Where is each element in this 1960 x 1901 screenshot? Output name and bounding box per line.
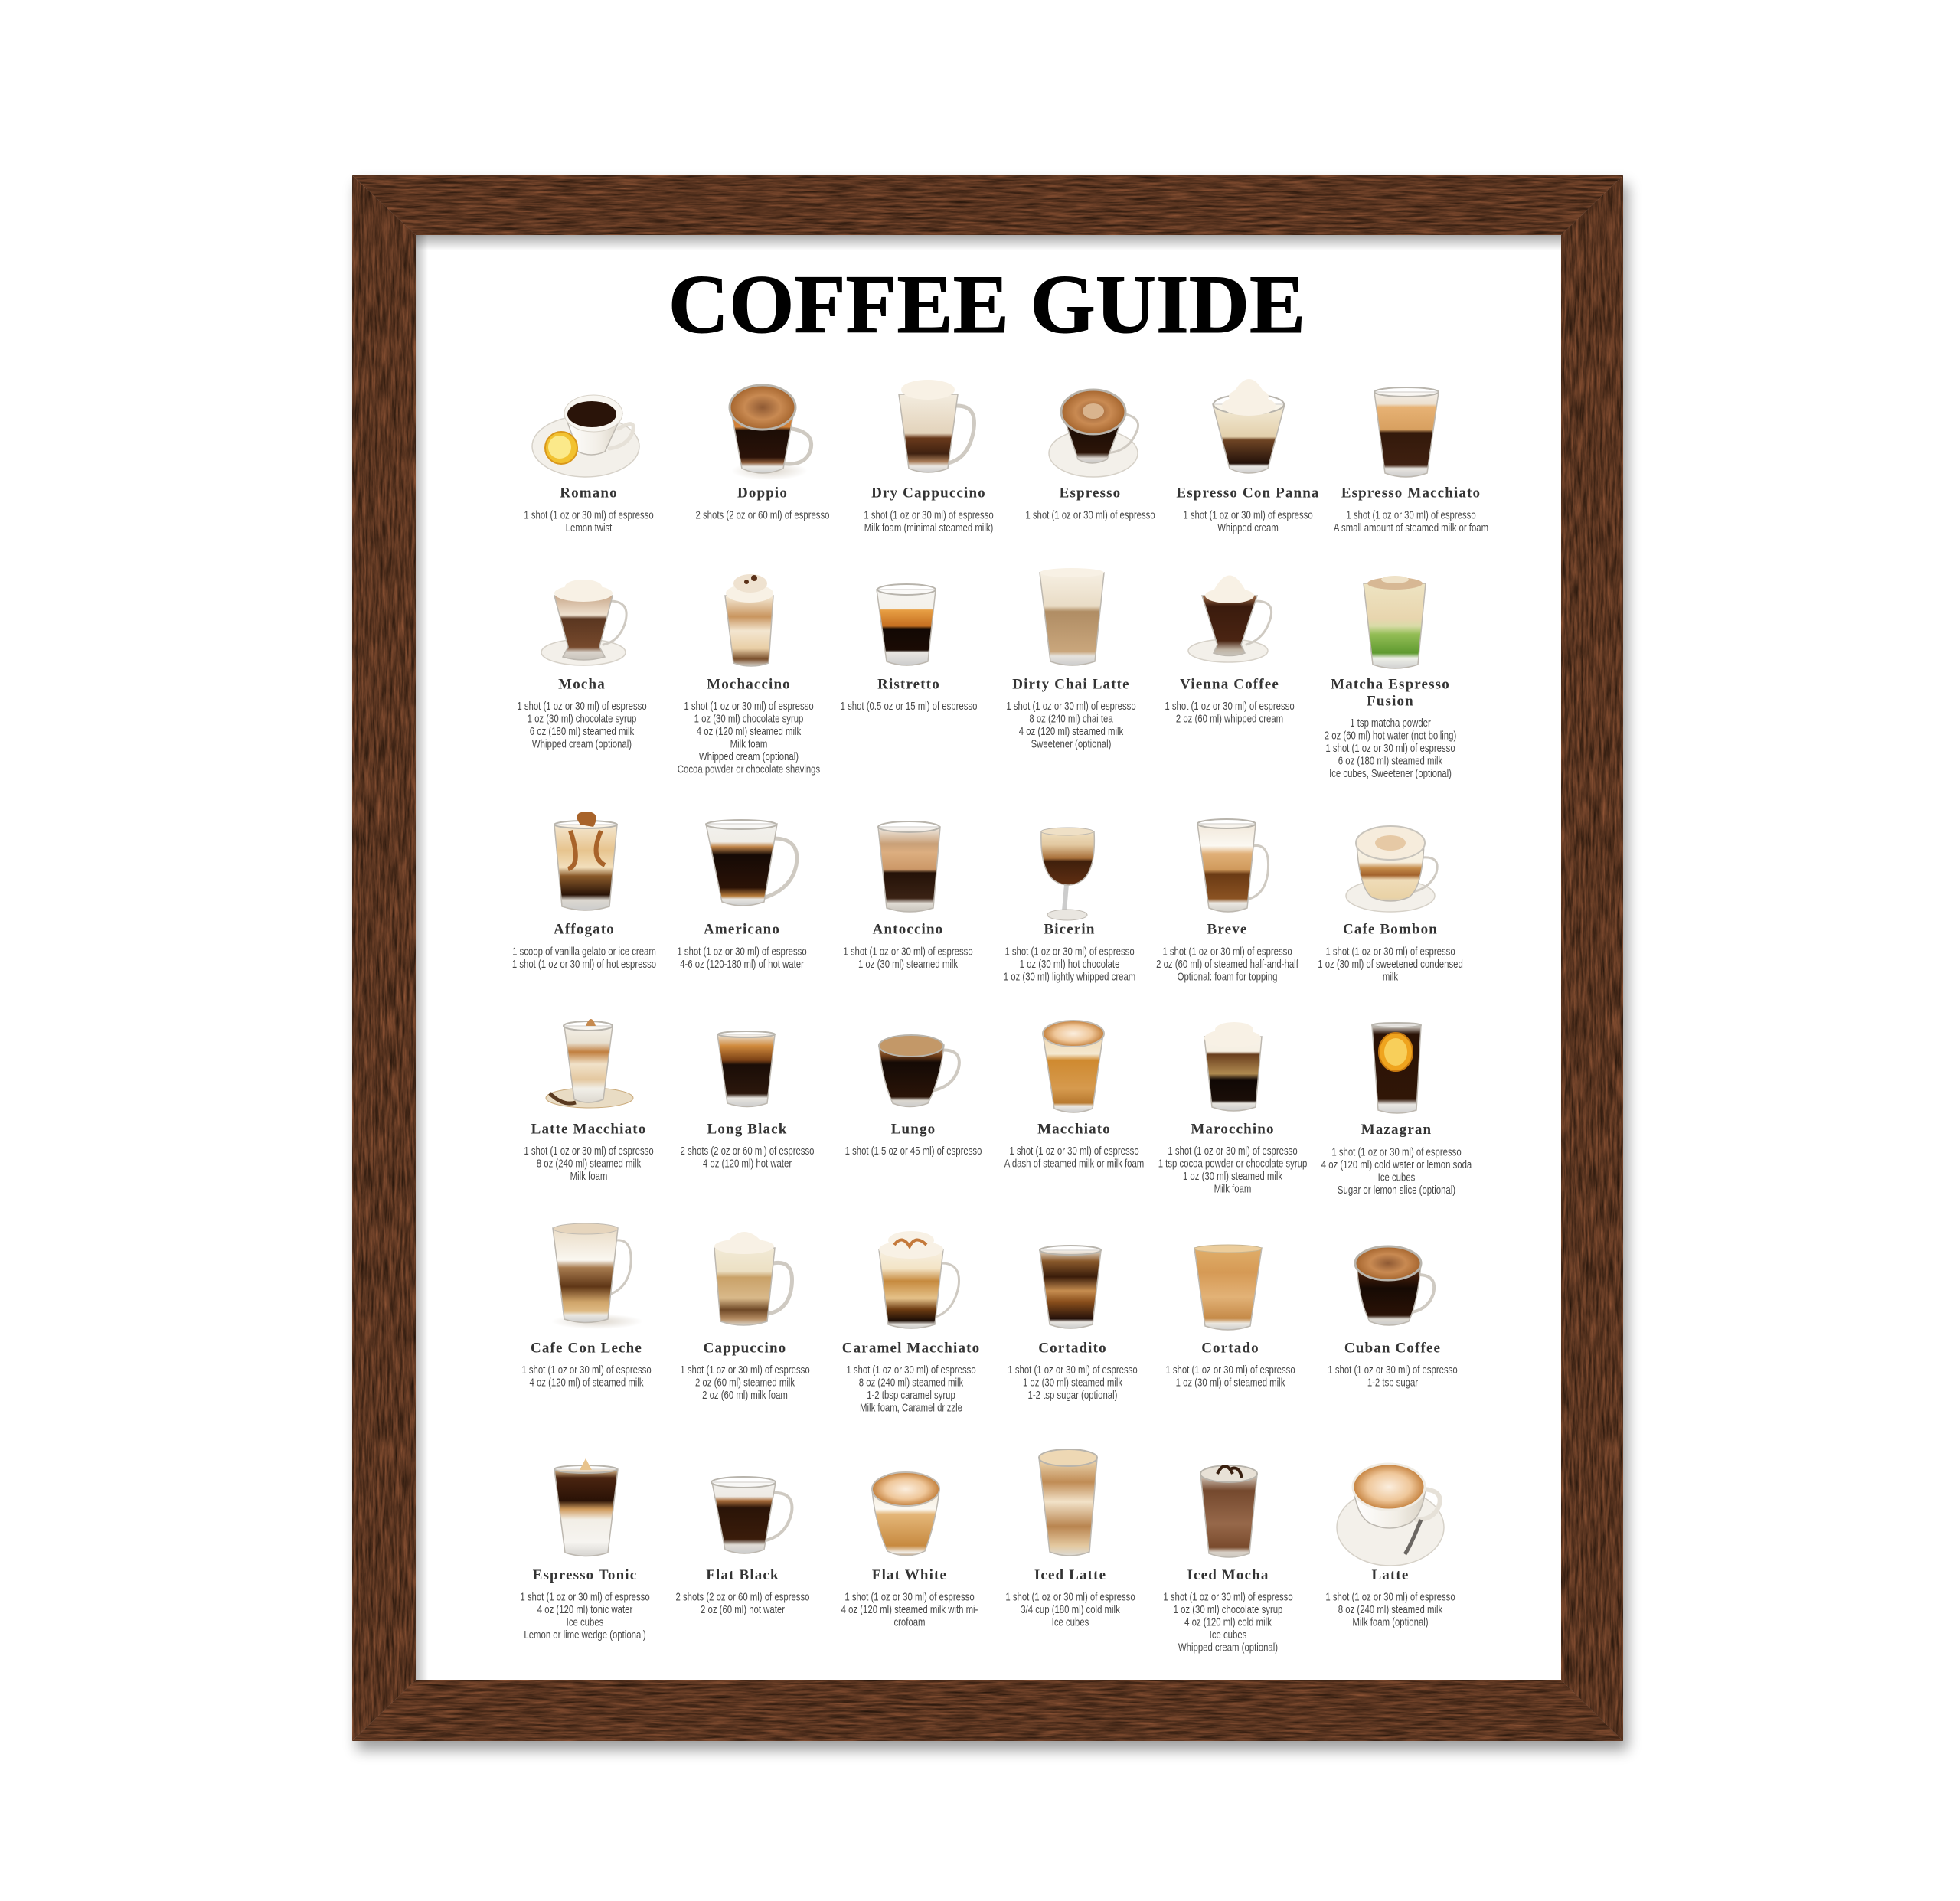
card: Iced Latte: [1005, 1449, 1135, 1628]
recipe: 1 shot (1 oz or 30 ml) of espresso: [1325, 1590, 1455, 1603]
icon: Macchiato glass with latte art: [1043, 1021, 1104, 1112]
name: Affogato: [554, 922, 615, 937]
recipe: 1 shot (1 oz or 30 ml) of espresso: [864, 508, 994, 521]
recipe: 1 shot (1 oz or 30 ml) of espresso: [1004, 945, 1135, 958]
recipe: 2 oz (60 ml) milk foam: [702, 1389, 788, 1401]
name: Flat White: [872, 1567, 947, 1583]
recipe: 1 shot (1 oz or 30 ml) of espresso: [1165, 700, 1295, 712]
icon: Dirty Chai Latte tall glass: [1040, 568, 1104, 665]
recipe: 1 shot (1 oz or 30 ml) of espresso: [1009, 1145, 1139, 1157]
name: Espresso Con Panna: [1176, 485, 1320, 501]
name: Bicerin: [1044, 922, 1096, 937]
name: Americano: [704, 922, 780, 937]
recipe: Milk foam: [730, 737, 767, 750]
icon: Cappuccino mug: [714, 1232, 792, 1325]
recipe: Sweetener (optional): [1031, 737, 1111, 750]
recipe: 1 tsp cocoa powder or chocolate syrup: [1158, 1157, 1307, 1170]
card: Mazagran: [1321, 1023, 1472, 1196]
icon: Cafe Bombon cup on saucer: [1346, 826, 1437, 912]
icon: Long Black glass: [717, 1031, 775, 1107]
recipe: A dash of steamed milk or milk foam: [1004, 1157, 1144, 1170]
card: Affogato: [512, 812, 656, 970]
recipe: 1 shot (1 oz or 30 ml) of espresso: [1325, 742, 1455, 754]
recipe: 1 shot (1 oz or 30 ml) of espresso: [684, 700, 814, 712]
recipe: 1-2 tsp sugar (optional): [1028, 1389, 1117, 1401]
recipe: 4 oz (120 ml) steamed milk: [697, 725, 802, 737]
recipe: 4 oz (120 ml) cold water or lemon soda: [1321, 1158, 1472, 1171]
recipe: 2 oz (60 ml) of steamed half-and-half: [1156, 958, 1298, 970]
card: Ristretto: [841, 584, 977, 712]
recipe: 1 shot (1 oz or 30 ml) of espresso: [524, 508, 654, 521]
card: Latte Macchiato: [524, 1019, 654, 1182]
recipe: 1 shot (1 oz or 30 ml) of espresso: [1168, 1145, 1298, 1157]
name: Lungo: [891, 1121, 936, 1138]
recipe: 1 shot (1 oz or 30 ml) of espresso: [680, 1364, 810, 1376]
recipe: 1 shot (0.5 oz or 15 ml) of espresso: [841, 700, 977, 712]
recipe: 2 oz (60 ml) whipped cream: [1176, 712, 1283, 725]
recipe: 2 oz (60 ml) steamed milk: [695, 1376, 795, 1389]
name: Dirty Chai Latte: [1012, 677, 1130, 692]
card: Americano: [677, 820, 807, 970]
icon: Mocha glass on saucer: [541, 580, 626, 665]
name: Dry Cappuccino: [871, 485, 986, 501]
recipe: Ice cubes, Sweetener (optional): [1329, 767, 1452, 779]
recipe: 4-6 oz (120-180 ml) of hot water: [680, 958, 804, 970]
icon: Flat Black mug: [711, 1477, 792, 1553]
name: Latte: [1371, 1567, 1410, 1583]
card: Dirty Chai Latte: [1006, 568, 1136, 750]
recipe: Whipped cream (optional): [532, 737, 632, 750]
recipe: Ice cubes: [1052, 1615, 1089, 1628]
recipe: milk: [1383, 970, 1399, 983]
icon: Breve mug: [1197, 819, 1269, 912]
name: Cortadito: [1038, 1340, 1107, 1357]
card: Bicerin: [1004, 828, 1135, 983]
card: Antoccino: [843, 821, 973, 970]
card: Doppio: [696, 385, 829, 521]
name: Breve: [1207, 922, 1247, 937]
icon: Bicerin goblet: [1041, 828, 1094, 920]
card: Espresso Con Panna: [1176, 379, 1320, 534]
icon: Affogato glass: [554, 812, 617, 910]
recipe: 1 tsp matcha powder: [1350, 717, 1431, 729]
recipe: 4 oz (120 ml) tonic water: [537, 1603, 633, 1615]
name: Long Black: [707, 1121, 787, 1138]
recipe: 2 oz (60 ml) hot water (not boiling): [1325, 729, 1456, 742]
card: Cuban Coffee: [1328, 1246, 1458, 1389]
card: Latte: [1325, 1464, 1455, 1628]
card: Dry Cappuccino: [864, 380, 994, 534]
card: Cappuccino: [680, 1232, 810, 1401]
recipe: 1-2 tsp sugar: [1367, 1376, 1419, 1389]
name: Espresso Tonic: [533, 1567, 637, 1583]
recipe: 8 oz (240 ml) steamed milk: [537, 1157, 642, 1170]
recipe: 1 shot (1 oz or 30 ml) of espresso: [843, 945, 973, 958]
icon: Espresso Tonic glass: [554, 1458, 618, 1556]
card: Lungo: [845, 1035, 982, 1157]
recipe: 1 oz (30 ml) lightly whipped cream: [1004, 970, 1135, 983]
recipe: crofoam: [893, 1615, 926, 1628]
card: Long Black: [681, 1031, 814, 1170]
icon: Flat White glass with latte art: [872, 1472, 939, 1556]
recipe: 1 shot (1 oz or 30 ml) of espresso: [1183, 508, 1313, 521]
card: Vienna Coffee: [1165, 576, 1295, 725]
recipe: 1 oz (30 ml) chocolate syrup: [1174, 1603, 1282, 1615]
recipe: 2 shots (2 oz or 60 ml) of espresso: [681, 1145, 814, 1157]
recipe: 1 shot (1 oz or 30 ml) of espresso: [1008, 1364, 1138, 1376]
recipe: 1 shot (1 oz or 30 ml) of espresso: [1005, 1590, 1135, 1603]
recipe: 1 scoop of vanilla gelato or ice cream: [512, 945, 656, 958]
recipe: A small amount of steamed milk or foam: [1334, 521, 1488, 534]
recipe: 2 shots (2 oz or 60 ml) of espresso: [696, 508, 829, 521]
card: Romano: [524, 395, 654, 534]
recipe: Lemon or lime wedge (optional): [524, 1628, 646, 1641]
name: Cappuccino: [704, 1340, 786, 1357]
card: Breve: [1156, 819, 1298, 983]
card: Matcha Espresso Fusion: [1325, 576, 1456, 779]
recipe: Sugar or lemon slice (optional): [1338, 1184, 1455, 1196]
icon: Antoccino glass: [878, 821, 940, 912]
recipe: 1 oz (30 ml) steamed milk: [858, 958, 958, 970]
name: Latte Macchiato: [531, 1121, 646, 1138]
recipe: 8 oz (240 ml) steamed milk: [859, 1376, 964, 1389]
icon: Ristretto shot glass: [877, 584, 936, 665]
icon: Caramel Macchiato mug: [879, 1231, 959, 1328]
recipe: 1-2 tbsp caramel syrup: [867, 1389, 956, 1401]
card: Flat White: [841, 1472, 978, 1628]
icon: Mazagran glass with lemon: [1372, 1023, 1421, 1113]
recipe: Whipped cream (optional): [699, 750, 799, 763]
card: Cafe Bombon: [1318, 826, 1463, 983]
recipe: 8 oz (240 ml) chai tea: [1029, 712, 1113, 725]
icon: Dry Cappuccino mug: [899, 380, 974, 472]
name: Flat Black: [706, 1567, 779, 1583]
recipe: 1 shot (1 oz or 30 ml) of espresso: [517, 700, 647, 712]
card: Marocchino: [1158, 1022, 1307, 1195]
name: Cortado: [1201, 1340, 1259, 1357]
recipe: 1 shot (1.5 oz or 45 ml) of espresso: [845, 1145, 982, 1157]
icon: Latte cup with spoon on saucer: [1337, 1464, 1444, 1566]
card: Mochaccino: [678, 574, 821, 776]
recipe: Optional: foam for topping: [1178, 970, 1277, 983]
recipe: 6 oz (180 ml) steamed milk: [530, 725, 635, 737]
icon: Cortado glass: [1194, 1245, 1262, 1330]
recipe: 1 shot (1 oz or 30 ml) of espresso: [1331, 1145, 1462, 1158]
recipe: 1 oz (30 ml) chocolate syrup: [694, 712, 803, 725]
icon: Espresso Con Panna glass: [1213, 379, 1285, 473]
icon: Lungo mug: [879, 1035, 959, 1107]
recipe: 1 oz (30 ml) of steamed milk: [1176, 1376, 1285, 1389]
recipe: Milk foam (optional): [1352, 1615, 1429, 1628]
name: Cuban Coffee: [1344, 1340, 1441, 1357]
recipe: Cocoa powder or chocolate shavings: [678, 763, 821, 776]
card: Cortado: [1165, 1245, 1295, 1389]
card: Iced Mocha: [1163, 1465, 1293, 1654]
recipe: 1 oz (30 ml) chocolate syrup: [528, 712, 636, 725]
recipe: 1 shot (1 oz or 30 ml) of espresso: [524, 1145, 654, 1157]
recipe: 1 shot (1 oz or 30 ml) of espresso: [1325, 945, 1455, 958]
recipe: 1 oz (30 ml) hot chocolate: [1020, 958, 1119, 970]
recipe: 1 shot (1 oz or 30 ml) of espresso: [846, 1364, 976, 1376]
name: Cafe Con Leche: [531, 1340, 642, 1357]
recipe: 2 shots (2 oz or 60 ml) of espresso: [676, 1590, 809, 1603]
recipe: 6 oz (180 ml) steamed milk: [1338, 754, 1443, 767]
recipe: 1 shot (1 oz or 30 ml) of espresso: [521, 1364, 652, 1376]
title: COFFEE GUIDE: [668, 258, 1305, 351]
recipe: 1 shot (1 oz or 30 ml) of espresso: [520, 1590, 650, 1603]
name: Romano: [560, 485, 618, 501]
card: Espresso Macchiato: [1334, 387, 1488, 534]
name: Doppio: [737, 485, 788, 501]
icon: Vienna Coffee glass with whipped cream: [1188, 576, 1272, 662]
recipe: Milk foam: [1214, 1182, 1251, 1195]
recipe: Whipped cream: [1217, 521, 1279, 534]
recipe: 1 oz (30 ml) steamed milk: [1023, 1376, 1122, 1389]
name: Espresso: [1060, 485, 1121, 501]
card: Macchiato: [1004, 1021, 1144, 1170]
recipe: 1 shot (1 oz or 30 ml) of espresso: [844, 1590, 975, 1603]
name: Marocchino: [1191, 1121, 1275, 1138]
name: Iced Latte: [1034, 1567, 1106, 1583]
card: Mocha: [517, 580, 647, 750]
name: Macchiato: [1037, 1121, 1111, 1138]
name: Mocha: [558, 677, 606, 692]
card: Cortadito: [1008, 1246, 1138, 1401]
icon: Matcha Espresso Fusion glass: [1364, 576, 1426, 668]
recipe: 4 oz (120 ml) steamed milk with mi-: [841, 1603, 978, 1615]
recipe: Milk foam, Caramel drizzle: [860, 1401, 962, 1414]
recipe: Whipped cream (optional): [1178, 1641, 1278, 1654]
recipe: 1 shot (1 oz or 30 ml) of espresso: [1165, 1364, 1295, 1376]
icon: Cortadito glass: [1040, 1246, 1101, 1328]
name: Antoccino: [873, 922, 943, 937]
icon: Doppio glass: [730, 385, 812, 480]
card: Flat Black: [676, 1477, 809, 1615]
card: Caramel Macchiato: [842, 1231, 980, 1414]
recipe: Lemon twist: [566, 521, 612, 534]
recipe: 1 shot (1 oz or 30 ml) of espresso: [1328, 1364, 1458, 1376]
icon: Iced Latte tall glass: [1039, 1449, 1097, 1556]
icon: Latte Macchiato glass on saucer: [546, 1019, 633, 1108]
card: Espresso: [1025, 390, 1155, 521]
recipe: 1 shot (1 oz or 30 ml) of espresso: [1346, 508, 1476, 521]
recipe: 4 oz (120 ml) of steamed milk: [529, 1376, 644, 1389]
name: Caramel Macchiato: [842, 1340, 980, 1357]
name: Fusion: [1367, 694, 1414, 709]
icon: Romano cup with lemon: [532, 395, 639, 477]
icon: Cuban Coffee glass mug: [1355, 1246, 1434, 1325]
recipe: 3/4 cup (180 ml) cold milk: [1021, 1603, 1120, 1615]
picture frame: [352, 175, 1628, 1750]
recipe: 1 shot (1 oz or 30 ml) of espresso: [1006, 700, 1136, 712]
name: Cafe Bombon: [1343, 922, 1438, 937]
icon: Mochaccino tall glass: [725, 574, 773, 666]
icon: Iced Mocha tall glass: [1200, 1465, 1257, 1557]
icon: Espresso glass on saucer: [1049, 390, 1138, 477]
icon: Espresso Macchiato glass: [1374, 387, 1439, 477]
recipe: 1 shot (1 oz or 30 ml) of hot espresso: [512, 958, 656, 970]
name: Mazagran: [1361, 1122, 1432, 1138]
name: Matcha Espresso: [1331, 677, 1450, 692]
recipe: 1 shot (1 oz or 30 ml) of espresso: [1163, 1590, 1293, 1603]
name: Ristretto: [877, 677, 940, 692]
recipe: 1 oz (30 ml) steamed milk: [1183, 1170, 1282, 1182]
recipe: Ice cubes: [567, 1615, 604, 1628]
recipe: Milk foam: [570, 1170, 607, 1182]
icon: Cafe Con Leche mug: [551, 1223, 643, 1329]
recipe: Ice cubes: [1210, 1628, 1247, 1641]
recipe: 4 oz (120 ml) steamed milk: [1019, 725, 1124, 737]
recipe: 1 oz (30 ml) of sweetened condensed: [1318, 958, 1463, 970]
recipe: 4 oz (120 ml) cold milk: [1184, 1615, 1272, 1628]
name: Mochaccino: [707, 677, 791, 692]
recipe: Ice cubes: [1378, 1171, 1416, 1184]
icon: Marocchino glass: [1204, 1022, 1262, 1111]
icon: Americano mug: [706, 820, 797, 906]
card: Cafe Con Leche: [521, 1223, 652, 1389]
recipe: 8 oz (240 ml) steamed milk: [1338, 1603, 1443, 1615]
name: Vienna Coffee: [1180, 677, 1279, 692]
name: Espresso Macchiato: [1341, 485, 1481, 501]
recipe: 1 shot (1 oz or 30 ml) of espresso: [1162, 945, 1292, 958]
name: Iced Mocha: [1187, 1567, 1269, 1583]
recipe: Milk foam (minimal steamed milk): [864, 521, 993, 534]
recipe: 1 shot (1 oz or 30 ml) of espresso: [677, 945, 807, 958]
recipe: 1 shot (1 oz or 30 ml) of espresso: [1025, 508, 1155, 521]
recipe: 2 oz (60 ml) hot water: [701, 1603, 786, 1615]
recipe: 4 oz (120 ml) hot water: [703, 1157, 792, 1170]
card: Espresso Tonic: [520, 1458, 650, 1641]
